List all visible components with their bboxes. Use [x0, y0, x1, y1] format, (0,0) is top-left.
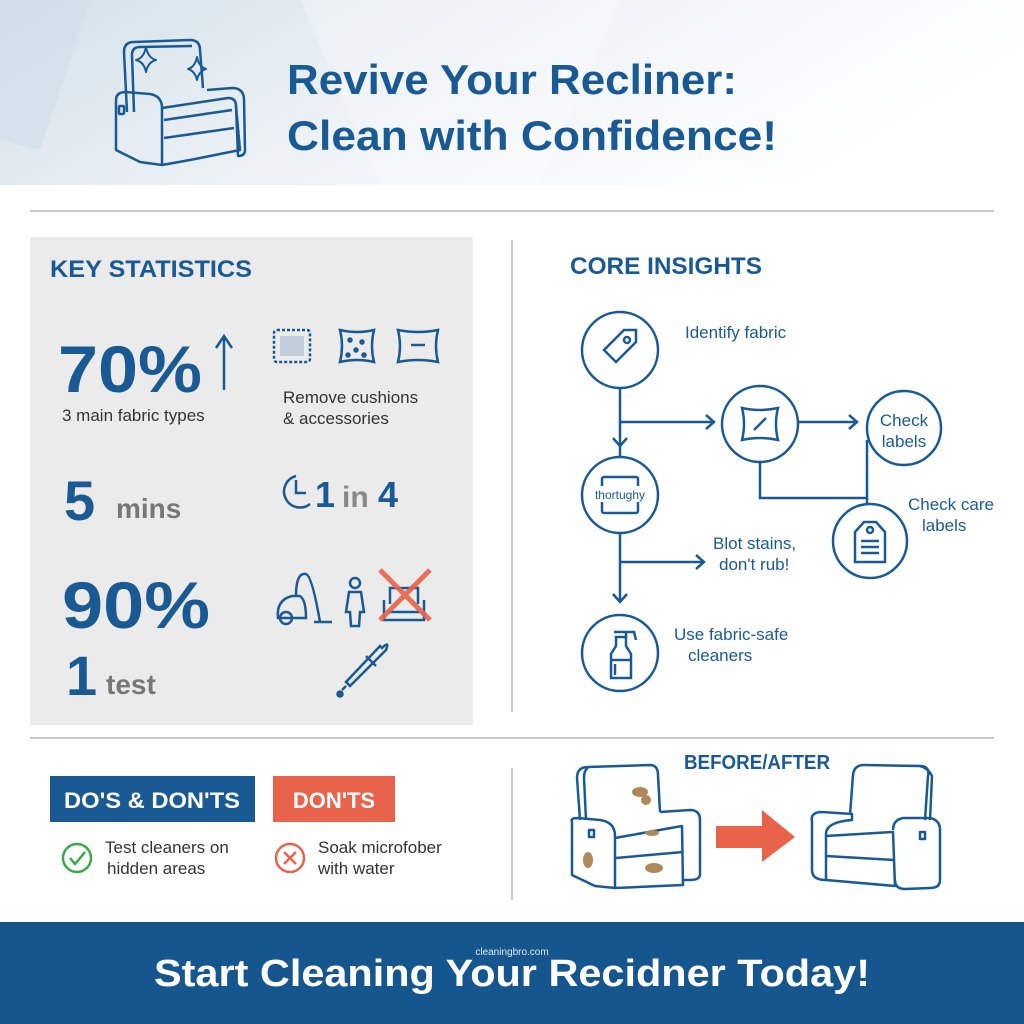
title: [287, 56, 777, 159]
heading: core insights: CORE INSIGHTS: [570, 253, 762, 280]
title: Revive Your Recliner:: [287, 56, 737, 103]
panel: before/after: BEFORE/AFTER: [684, 752, 831, 774]
stat: 1 in 4 with clock: in: [342, 481, 369, 514]
tag icon: [604, 330, 636, 362]
arrow: before to after: [716, 810, 795, 862]
labels: Blot stains,: [713, 534, 796, 553]
badge: don'ts: [273, 776, 395, 822]
heading: key statistics: KEY STATISTICS: [50, 256, 252, 283]
icon: dirty chair: [572, 765, 700, 888]
panel: before/after: [572, 752, 940, 889]
labels: labels: [882, 432, 926, 451]
icons: cushions: [274, 330, 438, 362]
labels: Use fabric-safe: [674, 625, 788, 644]
icon: clean chair: [812, 765, 940, 889]
panel: core insights flowchart: thortughy: [595, 488, 645, 502]
stat: 1 test: 1: [66, 644, 97, 707]
stat: 1 test: [66, 644, 156, 707]
footer banner: [0, 922, 1024, 1024]
badge: don'ts: DON'TS: [293, 788, 375, 813]
panel: do's and don'ts: [50, 776, 442, 878]
pillow icon: [742, 408, 778, 440]
stat: 70%: 3 main fabric types: [62, 406, 205, 425]
labels: don't rub!: [719, 555, 789, 574]
icon: header recliner with sparkles: [116, 40, 245, 165]
panel: core insights flowchart: [570, 253, 994, 691]
footer banner: Start Cleaning Your Recidner Today!: [154, 953, 870, 995]
text: remove cushions: Remove cushions: [283, 388, 418, 407]
do item: Test cleaners on: [105, 838, 229, 857]
icon: dropper: [338, 644, 387, 696]
stat: 90%: 90%: [62, 568, 210, 642]
do item: hidden areas: [107, 859, 205, 878]
don't item: [276, 838, 442, 878]
panel: key statistics: [30, 237, 473, 725]
labels: Identify fabric: [685, 323, 787, 342]
do item: [63, 838, 229, 878]
badge: do's & don'ts: DO'S & DON'TS: [64, 788, 240, 813]
stat: 5 mins: [64, 469, 181, 532]
badge: do's & don'ts: [50, 776, 255, 822]
labels: labels: [922, 516, 966, 535]
stat: 1 test: test: [106, 669, 156, 700]
connectors: [619, 388, 621, 457]
stat: 5 mins: 5: [64, 469, 95, 532]
don't item: Soak microfober: [318, 838, 442, 857]
text: remove cushions: & accessories: [283, 409, 389, 428]
stat: 1 in 4 with clock: [284, 474, 398, 515]
footer banner: cleaningbro.com: [475, 947, 549, 958]
stat: 1 in 4 with clock: 4: [378, 474, 398, 515]
stat: 5 mins: mins: [116, 493, 181, 524]
don't item: with water: [317, 859, 395, 878]
square: [602, 477, 638, 513]
labels: cleaners: [688, 646, 752, 665]
labels: Check care: [908, 495, 994, 514]
icons: vacuum, person, crossed chair: [278, 574, 424, 626]
care label: [855, 522, 885, 562]
text: remove cushions: [283, 388, 418, 428]
stat: 70%: [58, 332, 232, 425]
labels: [674, 323, 994, 665]
header band: [0, 0, 1024, 185]
circles: [582, 312, 658, 388]
labels: Check: [880, 411, 929, 430]
title: Clean with Confidence!: [287, 112, 777, 159]
stat: 1 in 4 with clock: 1: [315, 474, 335, 515]
spray bottle: [611, 637, 631, 678]
stat: 70%: 70%: [58, 332, 202, 406]
